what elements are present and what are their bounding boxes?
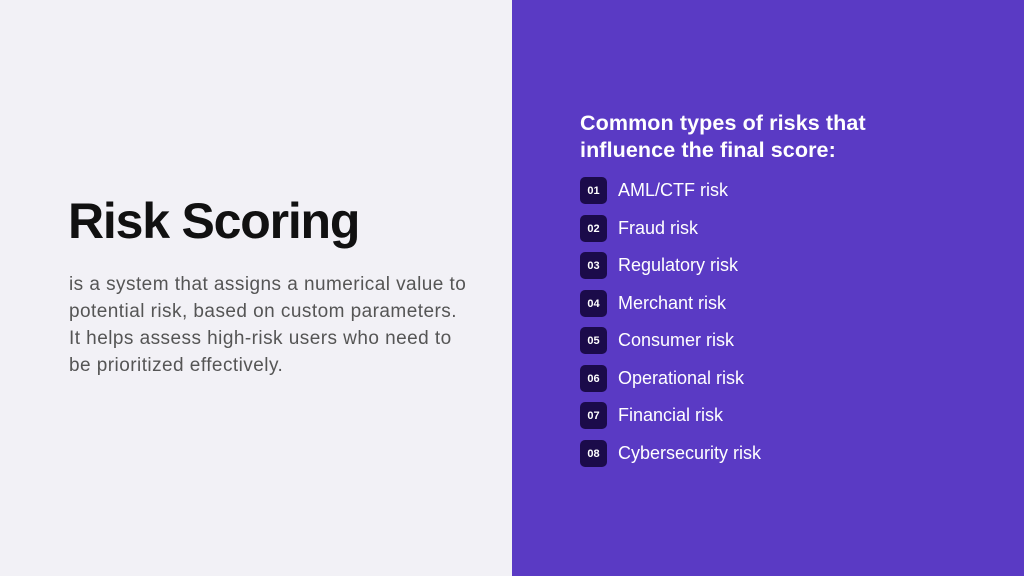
item 05: Consumer risk	[618, 330, 734, 350]
list heading	[580, 111, 866, 162]
item 08: Cybersecurity risk	[618, 443, 761, 463]
item 03: 03	[587, 260, 600, 272]
panel: left	[0, 0, 512, 576]
item 07: 07	[587, 410, 600, 422]
item 04: Merchant risk	[618, 293, 726, 313]
item 03: Regulatory risk	[618, 255, 738, 275]
title: Risk Scoring	[68, 193, 359, 249]
panel: right	[512, 0, 1024, 576]
item 06: 06	[587, 372, 600, 384]
item 08: 08	[587, 448, 600, 460]
item 07	[580, 402, 723, 429]
item 05	[580, 327, 734, 354]
item 02: 02	[587, 222, 600, 234]
description	[69, 274, 466, 376]
item 02	[580, 215, 698, 242]
item 01: 01	[587, 184, 600, 196]
item 04	[580, 290, 726, 317]
description: It helps assess high-risk users who need to	[69, 328, 452, 349]
item 06	[580, 365, 744, 392]
list heading: Common types of risks that	[580, 111, 866, 135]
description: potential risk, based on custom parameters.	[69, 301, 457, 322]
item 08	[580, 440, 761, 467]
item 01	[580, 177, 728, 204]
item 03	[580, 252, 738, 279]
description: be prioritized effectively.	[69, 355, 283, 376]
item 05: 05	[587, 334, 600, 346]
item 02: Fraud risk	[618, 218, 698, 238]
item 07: Financial risk	[618, 405, 723, 425]
description: is a system that assigns a numerical value to	[69, 274, 466, 295]
item 01: AML/CTF risk	[618, 180, 728, 200]
item 06: Operational risk	[618, 368, 744, 388]
list heading: influence the final score:	[580, 138, 836, 162]
item 04: 04	[587, 298, 600, 310]
